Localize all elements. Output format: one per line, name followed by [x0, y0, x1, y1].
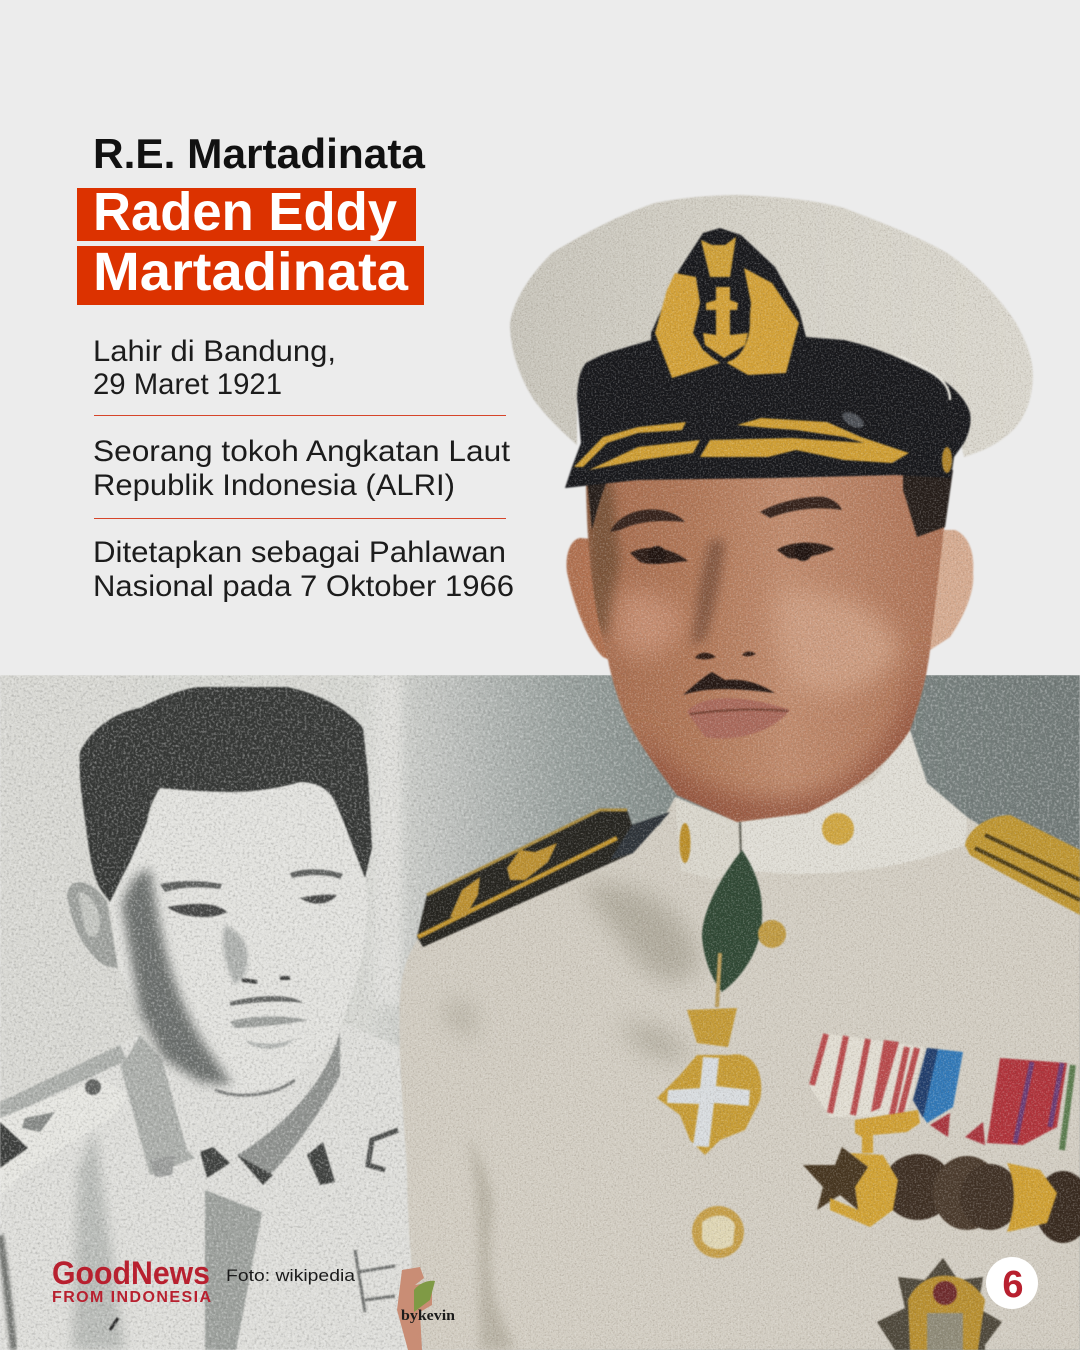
medals row	[883, 1154, 953, 1220]
cap highlight	[899, 356, 950, 400]
background: upper panel	[0, 0, 1080, 675]
text block: role: Republik Indonesia (ALRI)	[93, 469, 455, 502]
uniform	[400, 730, 1080, 1350]
text block: national hero: Nasional pada 7 Oktober 1966	[93, 570, 514, 603]
cap badge	[655, 268, 799, 378]
lips	[687, 698, 790, 739]
cheek shadow	[122, 870, 232, 1085]
moustache	[683, 672, 775, 695]
logo: GoodNews from Indonesia: GoodNews	[52, 1255, 210, 1291]
shirt and neck	[369, 1036, 412, 1350]
face	[110, 782, 368, 1095]
button	[692, 1206, 744, 1258]
uniform shading	[445, 884, 700, 1060]
collar pins	[680, 823, 690, 863]
artist watermark: bykevin: bykevin	[401, 1308, 456, 1324]
heading: short name: R.E. Martadinata	[93, 130, 426, 177]
logo: GoodNews from Indonesia	[52, 1255, 211, 1306]
brows	[610, 497, 842, 532]
hair	[586, 470, 953, 537]
text block: role: Seorang tokoh Angkatan Laut	[93, 435, 511, 468]
page number badge	[986, 1257, 1038, 1309]
heading: full name highlight line 2: Martadinata	[93, 242, 409, 302]
page number badge: 6	[1002, 1264, 1024, 1306]
head	[586, 468, 951, 822]
eyes and brows	[160, 869, 343, 892]
star badge	[877, 1258, 1002, 1350]
gold braid	[574, 418, 909, 470]
jaw shading	[643, 670, 926, 822]
medal ribbons	[810, 1033, 925, 1117]
right ear	[925, 530, 973, 650]
text block: birth: Lahir di Bandung,	[93, 335, 336, 368]
left ear	[567, 538, 610, 660]
text block: role	[93, 435, 511, 502]
eyes	[630, 543, 835, 564]
green leaf	[702, 850, 762, 992]
nose and mouth	[242, 978, 290, 982]
text block: birth	[93, 335, 336, 401]
epaulette and collar tabs	[0, 1108, 28, 1121]
cross medal	[687, 1008, 737, 1047]
photo credit: Foto: wikipedia	[226, 1266, 356, 1285]
nostrils	[695, 652, 756, 659]
heading: full name highlight line 1: Raden Eddy	[93, 182, 397, 242]
photo: black and white portrait	[0, 675, 1080, 1350]
collar	[675, 797, 742, 880]
logo: GoodNews from Indonesia: FROM INDONESIA	[52, 1289, 211, 1306]
artist watermark: bykevin	[397, 1267, 456, 1350]
cap top	[510, 195, 1033, 457]
text block: national hero: Ditetapkan sebagai Pahlawan	[93, 536, 506, 569]
hair	[80, 687, 372, 902]
cap band and badge	[565, 228, 971, 488]
text block: birth: 29 Maret 1921	[93, 368, 282, 401]
right epaulette	[965, 815, 1080, 915]
shirt collar shade	[0, 1035, 195, 1175]
photo: colourised portrait of R.E. Martadinata	[400, 195, 1080, 1350]
left epaulette	[417, 810, 670, 947]
ear	[67, 882, 118, 968]
text block: national hero	[93, 536, 514, 603]
